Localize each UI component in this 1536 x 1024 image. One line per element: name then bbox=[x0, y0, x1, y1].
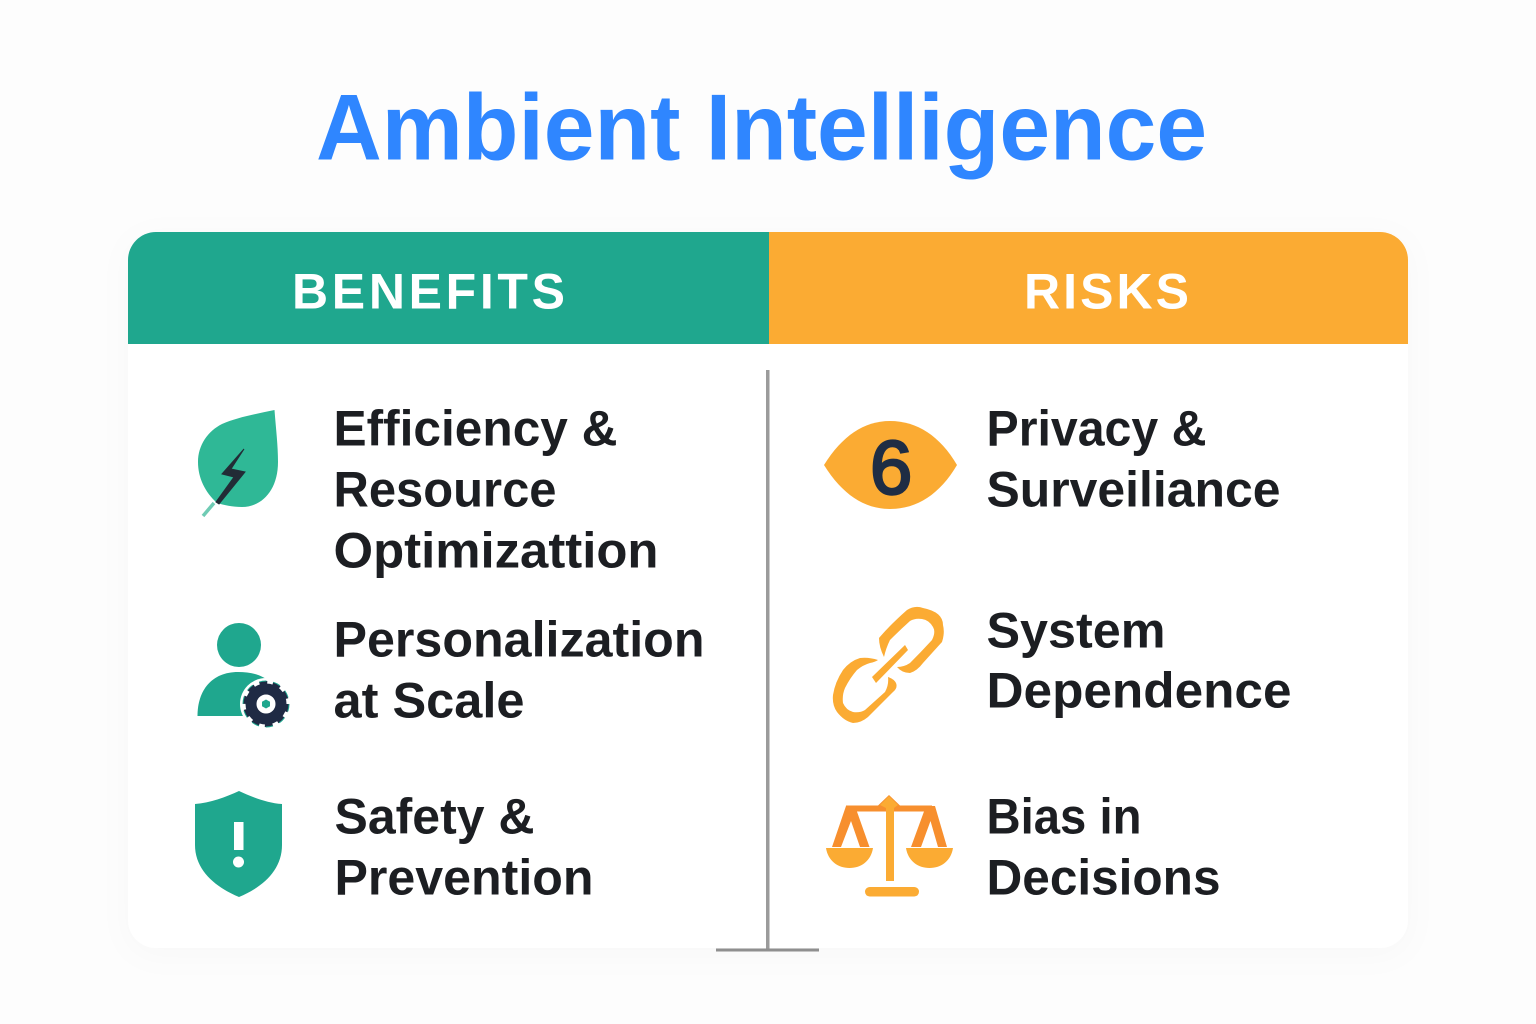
benefit: safety bbox=[195, 788, 594, 906]
label bbox=[986, 400, 1280, 518]
risk: bias bbox=[826, 788, 1220, 906]
label: Optimizattion bbox=[334, 522, 658, 578]
label: Bias in bbox=[986, 788, 1142, 844]
label: Resource bbox=[334, 462, 556, 518]
label: Efficiency & bbox=[334, 400, 618, 456]
label: System bbox=[986, 602, 1166, 658]
label: Prevention bbox=[334, 850, 594, 906]
icon: eye with 6 bbox=[824, 421, 957, 511]
label: Dependence bbox=[986, 662, 1292, 718]
header: benefits: BENEFITS bbox=[292, 264, 565, 320]
title: Ambient Intelligence bbox=[316, 74, 1207, 180]
icon: eye with 6: 6 bbox=[870, 426, 912, 511]
benefit: efficiency bbox=[198, 400, 658, 578]
icon: leaf with lightning bolt bbox=[198, 410, 278, 516]
icon: shield with exclamation bbox=[195, 791, 282, 897]
risk: dependence bbox=[833, 602, 1292, 723]
label: Privacy & bbox=[986, 400, 1206, 456]
header: risks: RISKS bbox=[1024, 264, 1189, 320]
label: Personalization bbox=[334, 612, 704, 668]
icon: chain link bbox=[833, 607, 944, 723]
label: at Scale bbox=[334, 672, 524, 728]
benefit: personalization bbox=[198, 612, 704, 730]
panel: comparison card bbox=[128, 232, 1408, 952]
label bbox=[334, 400, 658, 578]
label bbox=[986, 602, 1292, 718]
label bbox=[334, 788, 594, 906]
label: Safety & bbox=[334, 788, 534, 844]
icon: person with gear bbox=[198, 623, 292, 730]
label bbox=[986, 788, 1220, 906]
header: benefits bbox=[128, 232, 769, 344]
label: Decisions bbox=[986, 850, 1220, 906]
icon: balance scale bbox=[826, 795, 953, 896]
center divider bbox=[716, 370, 819, 952]
label: Surveiliance bbox=[986, 462, 1280, 518]
risk: privacy bbox=[824, 400, 1280, 518]
label bbox=[334, 612, 704, 728]
header: risks bbox=[769, 232, 1408, 344]
